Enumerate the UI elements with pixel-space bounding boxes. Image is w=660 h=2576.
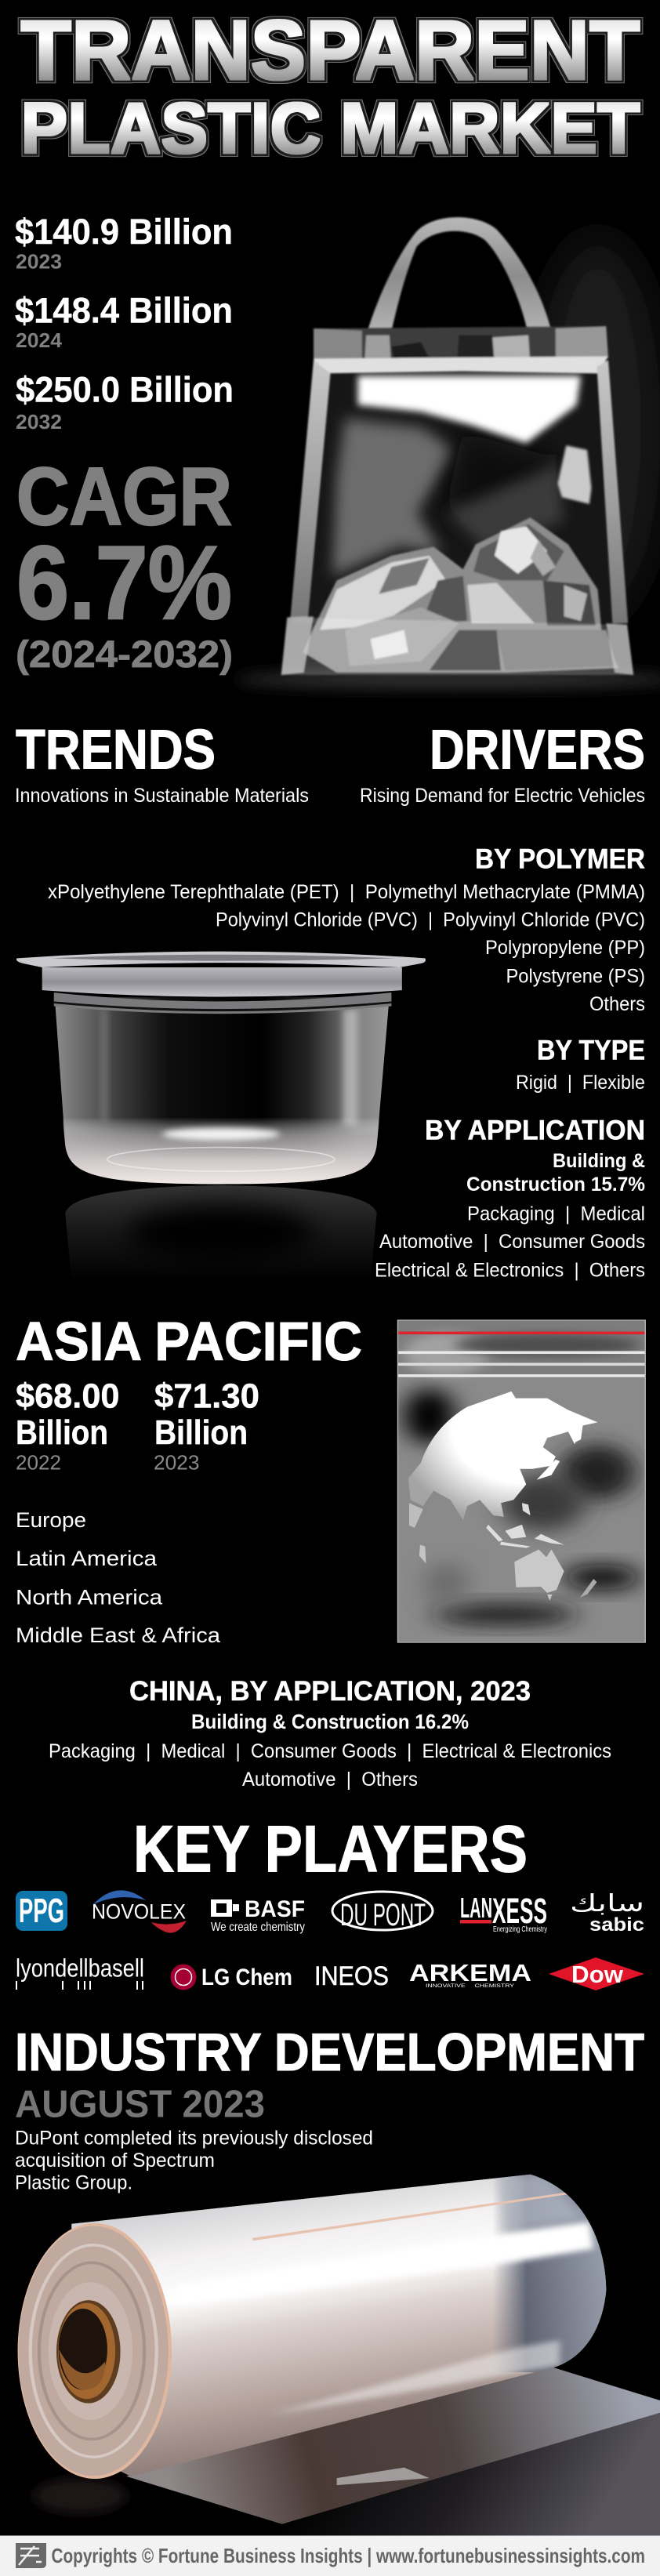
- title: TRANSPARENT: [20, 2, 640, 97]
- logo: Novolex: NOVOLEX: [92, 1900, 186, 1924]
- logo: PPG: [16, 1891, 67, 1931]
- key players heading: KEY PLAYERS: [133, 1812, 528, 1886]
- by application segment: Building &: [553, 1150, 645, 1172]
- asia pacific heading and values: $71.30: [154, 1377, 259, 1416]
- by type segment: [516, 1035, 645, 1094]
- by application segment: [375, 1116, 645, 1282]
- trends: Innovations in Sustainable Materials: [15, 785, 309, 807]
- logo: Arkema: ARKEMA: [409, 1959, 531, 1986]
- asia pacific heading and values: $68.00: [16, 1377, 119, 1416]
- by polymer segment: Polyvinyl Chloride (PVC) | Polyvinyl Chloride (PVC): [216, 909, 645, 931]
- by polymer segment: xPolyethylene Terephthalate (PET) | Polymethyl Methacrylate (PMMA): [48, 881, 645, 903]
- logo: Sabic: سابك: [570, 1890, 644, 1917]
- by application segment: BY APPLICATION: [425, 1116, 645, 1146]
- continents: [408, 1391, 598, 1601]
- asia pacific heading and values: 2023: [154, 1450, 199, 1474]
- logo: DuPont: [332, 1892, 433, 1932]
- by polymer segment: Others: [589, 993, 645, 1015]
- logo: Lanxess: XESS: [492, 1891, 547, 1931]
- logo: Arkema: INNOVATIVE CHEMISTRY: [426, 1984, 514, 1989]
- CAGR block: [16, 452, 233, 676]
- other regions list: Middle East & Africa: [16, 1624, 221, 1647]
- logo: Dow: [549, 1957, 644, 1990]
- logo: BASF: [211, 1896, 305, 1934]
- logo: PPG: PPG: [19, 1892, 64, 1930]
- logo: LG Chem: [171, 1965, 292, 1990]
- by type segment: Rigid | Flexible: [516, 1072, 645, 1094]
- logo: Lanxess: [460, 1891, 547, 1934]
- logo: Sabic: sabic: [589, 1914, 644, 1936]
- by application segment: Packaging | Medical: [467, 1203, 645, 1225]
- china by application: [49, 1676, 611, 1791]
- china by application: Automotive | Others: [242, 1769, 418, 1791]
- other regions list: Europe: [16, 1508, 86, 1532]
- map panel: globe: [397, 1320, 645, 1642]
- other regions list: [16, 1508, 221, 1647]
- other regions list: Latin America: [16, 1547, 158, 1570]
- industry development: [15, 2023, 644, 2194]
- logo: BASF: BASF: [245, 1896, 305, 1922]
- logo: Lanxess: LAN: [460, 1892, 492, 1924]
- china by application: Building & Construction 16.2%: [191, 1710, 469, 1733]
- by polymer segment: Polypropylene (PP): [485, 937, 645, 959]
- asia pacific heading and values: Billion: [154, 1413, 248, 1452]
- CAGR block: CAGR: [16, 452, 232, 542]
- market value stats: $250.0 Billion: [16, 370, 234, 410]
- market value stats: [15, 212, 234, 434]
- logo: Novolex: [92, 1890, 187, 1933]
- logo: Fortune Business Insights: [16, 2543, 46, 2568]
- logos row 2: [16, 1954, 644, 1991]
- logos row 1: [16, 1890, 644, 1936]
- logo: Lanxess: Energizing Chemistry: [493, 1925, 547, 1934]
- china by application: Packaging | Medical | Consumer Goods | Electrical & Electronics: [49, 1740, 611, 1762]
- footer: [0, 2535, 660, 2576]
- market value stats: $148.4 Billion: [15, 291, 233, 331]
- image: film roll: [18, 2171, 660, 2536]
- by application segment: Automotive | Consumer Goods: [379, 1231, 645, 1253]
- market value stats: 2032: [16, 410, 62, 434]
- logo: LyondellBasell: [16, 1954, 144, 1990]
- by application segment: Construction 15.7%: [466, 1174, 645, 1195]
- asia pacific heading and values: [16, 1311, 362, 1474]
- asia pacific heading and values: ASIA PACIFIC: [16, 1311, 362, 1372]
- title: [20, 2, 640, 169]
- asia pacific heading and values: 2022: [16, 1450, 61, 1474]
- by polymer segment: [48, 844, 645, 1015]
- industry development: acquisition of Spectrum: [15, 2150, 215, 2171]
- title: PLASTIC MARKET: [20, 89, 640, 169]
- drivers: [360, 720, 645, 807]
- industry development: AUGUST 2023: [15, 2084, 265, 2126]
- industry development: Plastic Group.: [15, 2172, 132, 2194]
- CAGR block: (2024-2032): [16, 634, 233, 676]
- by type segment: BY TYPE: [537, 1035, 645, 1066]
- logo: LyondellBasell: lyondellbasell: [16, 1954, 144, 1983]
- market value stats: $140.9 Billion: [15, 212, 233, 252]
- trends: TRENDS: [16, 720, 216, 782]
- logo: LG Chem: LG Chem: [201, 1965, 292, 1990]
- market value stats: 2024: [16, 328, 63, 352]
- other regions list: North America: [16, 1585, 163, 1609]
- logo: BASF: We create chemistry: [211, 1921, 305, 1934]
- logo: Ineos: INEOS: [314, 1961, 389, 1991]
- industry development: DuPont completed its previously disclosed: [15, 2127, 373, 2149]
- china by application: CHINA, BY APPLICATION, 2023: [129, 1676, 531, 1707]
- asia pacific heading and values: Billion: [16, 1413, 108, 1452]
- logo: Sabic: [570, 1890, 644, 1936]
- market value stats: 2023: [16, 250, 62, 274]
- by polymer segment: BY POLYMER: [475, 844, 645, 875]
- trends: [15, 720, 309, 807]
- CAGR block: 6.7%: [16, 525, 232, 641]
- logo: DuPont: DU PONT: [340, 1898, 426, 1932]
- by polymer segment: Polystyrene (PS): [506, 966, 645, 988]
- by application segment: Electrical & Electronics | Others: [375, 1260, 645, 1282]
- logo: Dow: Dow: [571, 1961, 624, 1988]
- image: transparent plastic cup: [16, 952, 426, 1281]
- image: transparent plastic bag: [236, 217, 660, 688]
